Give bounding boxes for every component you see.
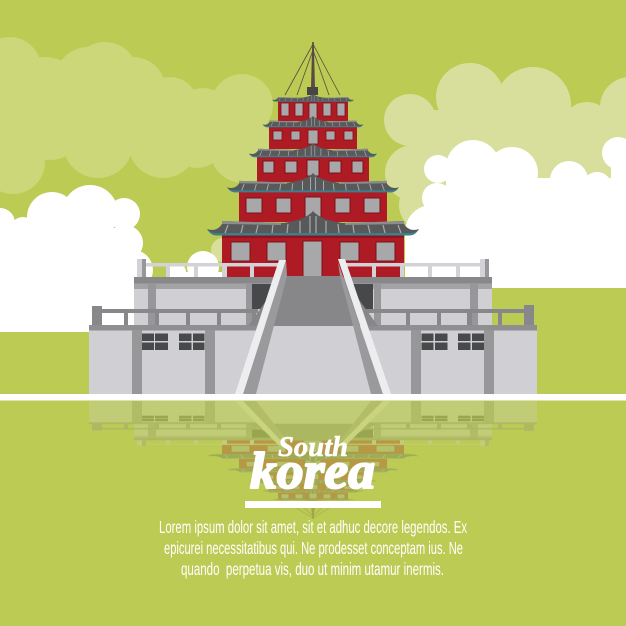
title: korea: korea [250,443,375,500]
body text: Lorem ipsum dolor sit amet, sit et adhuc decore legendos. Ex [159,517,467,537]
palace building [89,42,537,394]
body text: quando perpetua vis, duo ut minim utamur inermis. [181,559,444,579]
small pale cloud behind tower [211,238,235,262]
title: South: South [278,431,348,463]
cloud: white right [405,137,626,288]
body text: epicurei necessitatibus qui. Ne prodesset conceptam ius. Ne [164,538,463,558]
body text [159,517,467,579]
ground strip [0,394,626,400]
cloud: pale right [384,63,626,231]
building reflection [89,401,537,519]
cloud: white left [0,185,222,332]
cloud: pale left [0,37,276,194]
title underline [245,501,381,508]
